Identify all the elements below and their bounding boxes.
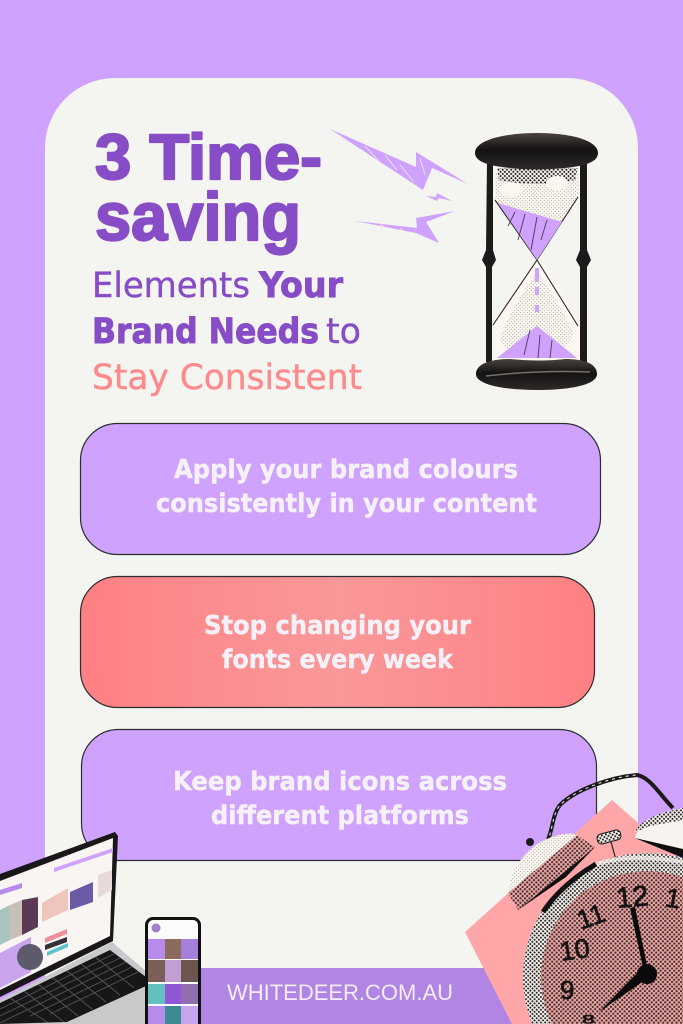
clock numbers: 12: [615, 880, 650, 915]
card: brand icons: [82, 730, 596, 860]
handle bracket: [526, 838, 534, 846]
clock numbers: 1: [663, 882, 683, 915]
hourglass top cap: [475, 133, 598, 170]
hourglass top shadow: [497, 168, 578, 184]
hourglass posts: [482, 160, 591, 362]
keyboard keys: [0, 953, 140, 1024]
laptop keyboard: [0, 950, 146, 1024]
clock numbers: 9: [560, 975, 574, 1005]
left bell: [509, 834, 577, 908]
icon: lightning bolts: [330, 129, 468, 243]
title: [95, 121, 322, 255]
subtitle: Stay Consistent: [92, 358, 362, 398]
clock outer rim: [523, 853, 683, 1024]
card: fonts: [80, 576, 594, 708]
screen header: [0, 883, 22, 895]
website url: WHITEDEER.COM.AU: [227, 980, 453, 1005]
laptop screen: [0, 838, 113, 990]
hourglass glass outline: [493, 197, 578, 326]
screen top bar: [54, 848, 113, 872]
hourglass sand scratches: [508, 212, 552, 358]
subtitle: to: [326, 312, 361, 352]
hourglass sand top: [498, 203, 562, 260]
icon: laptop: [0, 832, 147, 1024]
subtitle: [92, 266, 362, 398]
subtitle: Brand Needs: [92, 312, 319, 352]
hourglass falling sand: [535, 268, 539, 312]
card: fonts: Stop changing your: [204, 611, 471, 641]
clock hour hand: [599, 970, 648, 1012]
screen photo: [0, 937, 31, 988]
phone image grid: [148, 939, 198, 1024]
screen thumbnails: [0, 905, 10, 945]
right bell: [635, 808, 683, 853]
hourglass glass shading: [495, 172, 579, 222]
card: brand colours: [80, 424, 600, 554]
clock face: [541, 871, 683, 1024]
clock numbers: 10: [558, 933, 592, 967]
left bell striker: [508, 835, 595, 910]
subtitle: Your: [258, 266, 344, 306]
subtitle: Elements: [92, 266, 250, 306]
title: saving: [95, 179, 301, 255]
laptop lid: [0, 832, 118, 997]
clock handle: [547, 775, 673, 842]
rim dark band: [543, 864, 596, 912]
clock numbers: [558, 880, 683, 1024]
card: brand icons: Keep brand icons across: [173, 767, 507, 797]
clock hammer: [596, 829, 622, 845]
hourglass sand bottom: [497, 326, 577, 358]
clock minute hand: [630, 907, 648, 972]
phone screen: [148, 920, 198, 1024]
card: brand icons: different platforms: [211, 801, 469, 831]
laptop base: [0, 942, 147, 1024]
card: brand colours: Apply your brand colours: [174, 455, 518, 485]
icon: phone: [145, 917, 201, 1024]
clock pivot: [637, 964, 657, 984]
hourglass highlights: [499, 176, 568, 197]
card: brand colours: consistently in your content: [156, 489, 537, 519]
pink square behind clock: [465, 800, 683, 1024]
screen headline: [45, 929, 67, 943]
icon: hourglass: [475, 133, 598, 390]
rim highlight: [592, 858, 683, 866]
hourglass glass bulbs: [493, 170, 580, 360]
title: 3 Time-: [95, 121, 322, 193]
footer bar: [145, 968, 525, 1024]
card: fonts: fonts every week: [222, 645, 454, 675]
hourglass bottom cap: [476, 359, 597, 390]
icon: alarm clock: [508, 775, 683, 1024]
clock numbers: 11: [573, 898, 609, 936]
left bell clapper: [518, 847, 595, 910]
